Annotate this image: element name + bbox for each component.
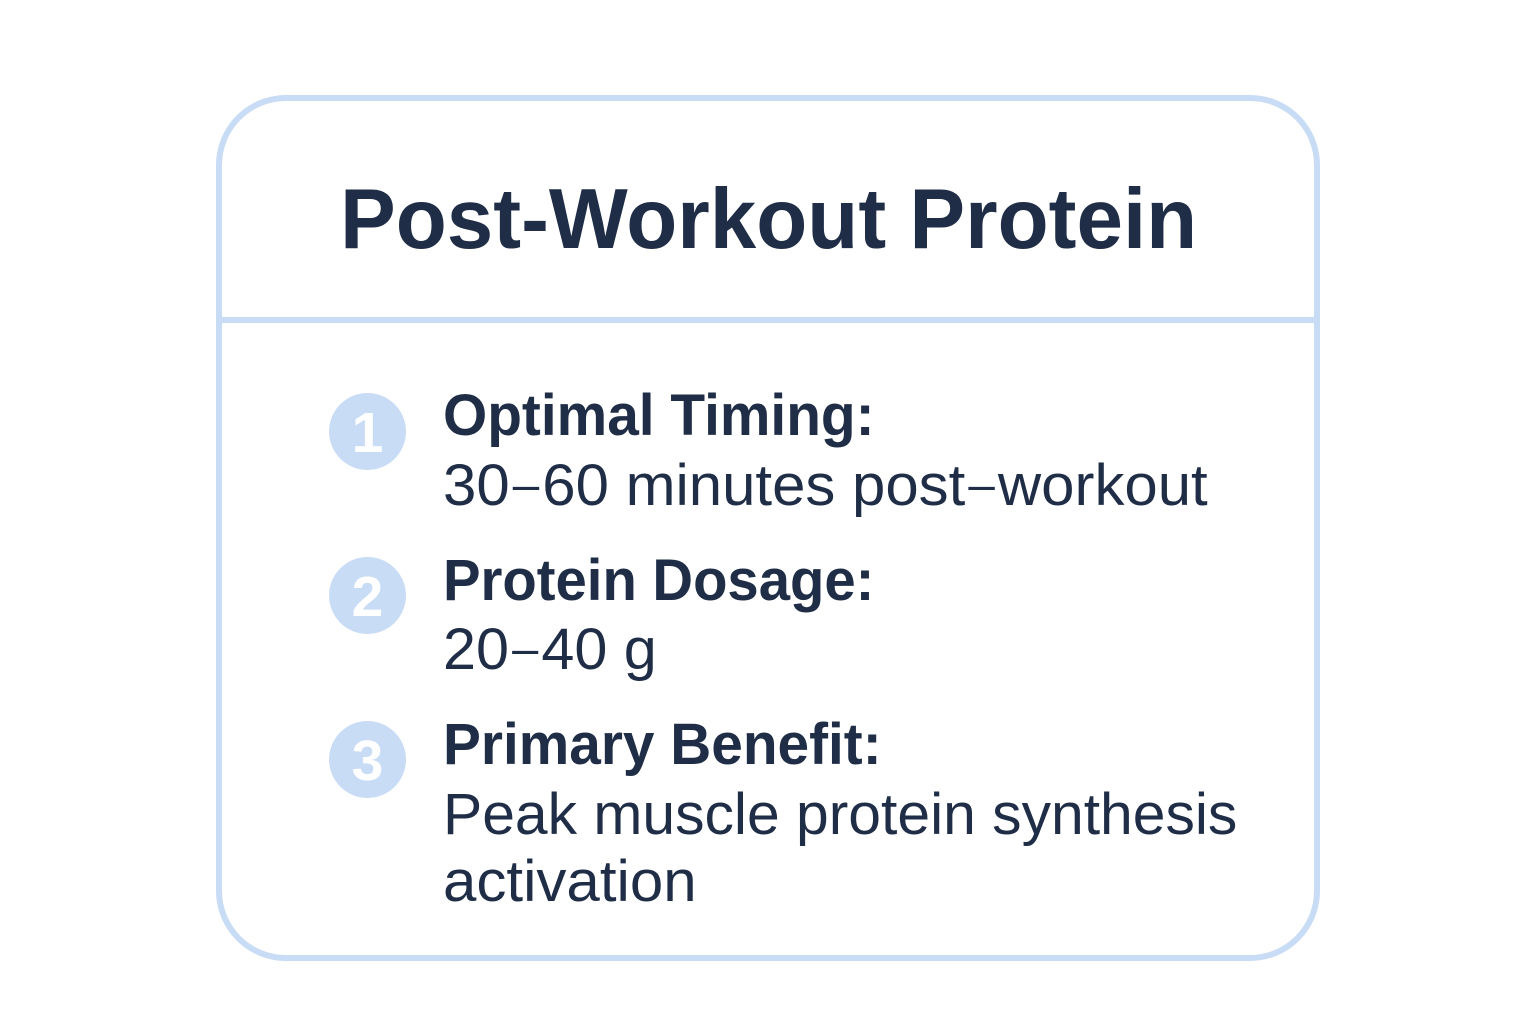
icon: number 1: 1 bbox=[352, 401, 383, 465]
text block: primary benefit: Peak muscle protein synthesis bbox=[443, 782, 1237, 847]
icon: number 2 bbox=[329, 557, 406, 634]
panel: card bbox=[216, 95, 1320, 961]
text block: primary benefit: Primary Benefit: bbox=[443, 712, 882, 777]
text block: optimal timing bbox=[443, 383, 1208, 518]
icon: number 1 bbox=[329, 393, 406, 470]
icon: number 2: 2 bbox=[352, 565, 383, 629]
text block: primary benefit: activation bbox=[443, 849, 697, 914]
icon: number 3: 3 bbox=[352, 729, 383, 793]
text block: protein dosage bbox=[443, 548, 874, 682]
title: Post-Workout Protein bbox=[340, 172, 1197, 267]
text block: primary benefit bbox=[443, 712, 1237, 914]
icon: number 3 bbox=[329, 721, 406, 798]
text block: optimal timing: Optimal Timing: bbox=[443, 383, 875, 448]
text block: protein dosage: Protein Dosage: bbox=[443, 548, 874, 613]
text block: protein dosage: 20–40 g bbox=[443, 617, 657, 682]
text block: optimal timing: 30–60 minutes post–workout bbox=[443, 453, 1208, 518]
divider bbox=[219, 317, 1317, 323]
